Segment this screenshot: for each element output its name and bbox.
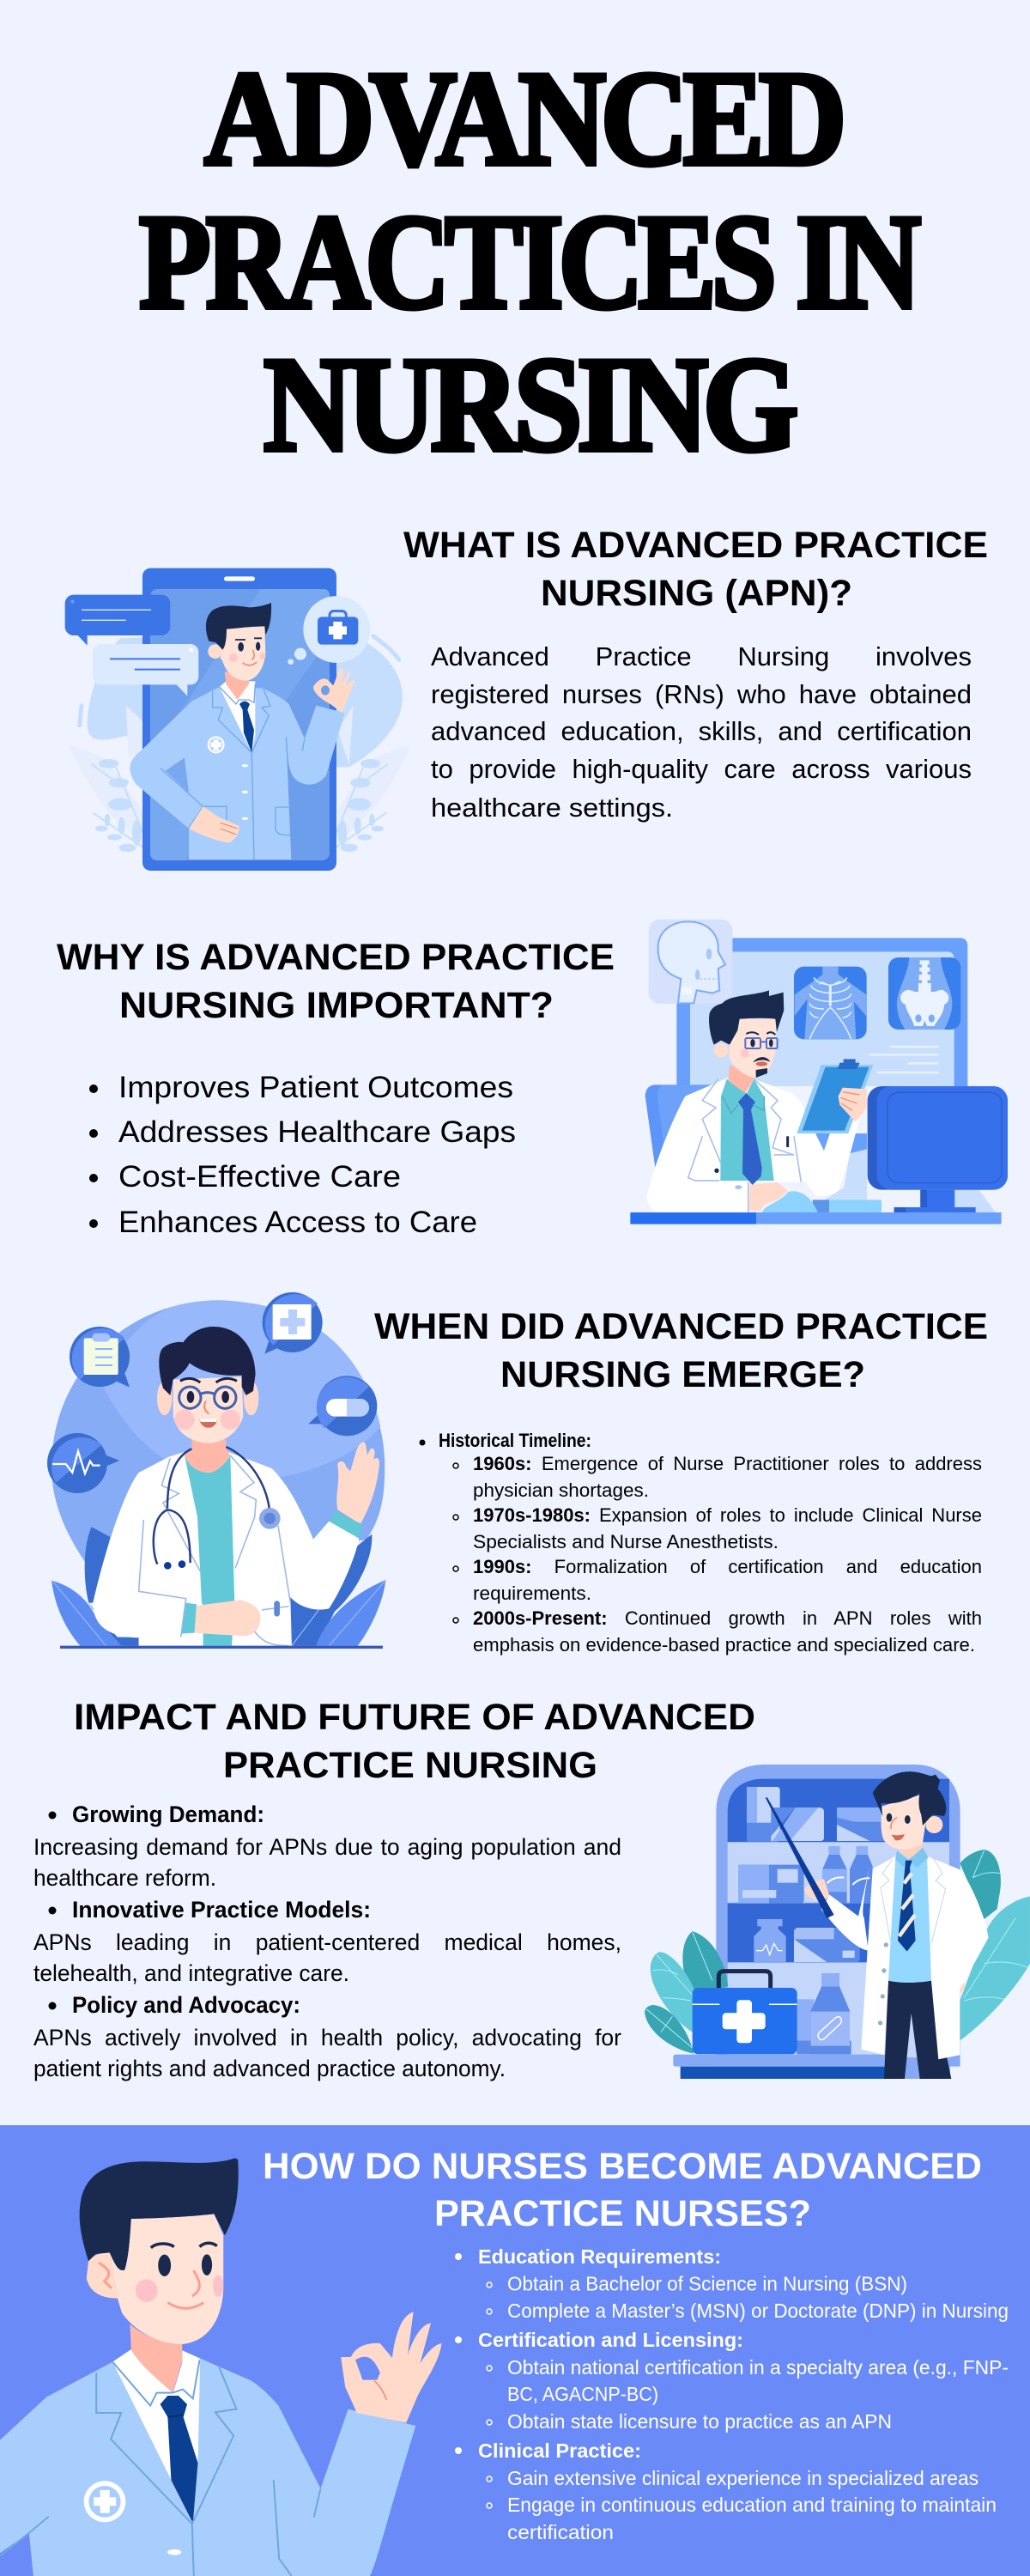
- item: certification and licensing: Obtain state licensure to practice as an APN: [507, 2410, 892, 2433]
- icon: plus bubble: [263, 1292, 323, 1354]
- heading: IMPACT AND FUTURE OF ADVANCED: [74, 1697, 755, 1738]
- bullet list: Improves Patient Outcomes: [118, 1071, 513, 1104]
- heading: NURSING EMERGE?: [500, 1354, 865, 1395]
- icon: desktop monitor: [868, 1086, 1008, 1212]
- timeline list: [419, 1430, 982, 1656]
- heading: [403, 525, 988, 614]
- heading: [57, 937, 615, 1026]
- illustration: doctor in phone: [65, 568, 410, 871]
- item: certification and licensing: BC, AGACNP-BC): [507, 2383, 658, 2405]
- icon: chest x-ray: [794, 967, 867, 1039]
- title: [139, 44, 920, 480]
- item: clinical practice: Engage in continuous education and training to maintain: [507, 2494, 997, 2516]
- icon: pill bubble: [308, 1376, 377, 1436]
- timeline item: 1960s: physician shortages.: [473, 1479, 649, 1501]
- text block: definition: to provide high-quality care across various: [431, 754, 972, 784]
- bullet list: Addresses Healthcare Gaps: [118, 1115, 516, 1149]
- item: certification and licensing: Certification and Licensing:: [478, 2329, 743, 2351]
- timeline item: 1970s-1980s: Specialists and Nurse Anesthetists.: [473, 1531, 779, 1552]
- item: clinical practice: Gain extensive clinical experience in specialized areas: [507, 2467, 978, 2489]
- item: policy and advocacy: patient rights and advanced practice autonomy.: [33, 2056, 506, 2081]
- heading: [263, 2146, 982, 2234]
- list: pathway to APN: [455, 2245, 1009, 2543]
- item: innovative practice models: Innovative Practice Models:: [72, 1897, 371, 1923]
- item: growing demand: [33, 1801, 621, 1891]
- panel: when did it emerge: [47, 1292, 988, 1656]
- heading: WHY IS ADVANCED PRACTICE: [57, 937, 615, 978]
- illustration: doctor with stethoscope: [47, 1292, 385, 1649]
- text block: definition: advanced education, skills, and certification: [431, 716, 972, 746]
- item: innovative practice models: APNs leading in patient-centered medical homes,: [33, 1929, 621, 1955]
- text block: definition: registered nurses (RNs) who have obtained: [431, 679, 972, 709]
- panel: how nurses become APNs: [0, 2125, 1030, 2576]
- item: policy and advocacy: [33, 1992, 621, 2081]
- panel: title: [139, 44, 922, 480]
- item: education requirements: Education Requirements:: [478, 2245, 721, 2268]
- icon: clipboard bubble: [70, 1327, 130, 1388]
- heading: PRACTICE NURSES?: [434, 2193, 811, 2234]
- timeline item: 2000s-present: [453, 1606, 982, 1656]
- panel: why important: [57, 919, 1008, 1239]
- heading: NURSING (APN)?: [541, 573, 852, 614]
- icon: skull x-ray: [649, 920, 732, 1004]
- bullet list: Enhances Access to Care: [118, 1206, 477, 1239]
- panel: what is APN: [65, 525, 988, 871]
- item: innovative practice models: telehealth, and integrative care.: [33, 1960, 349, 1986]
- item: certification and licensing: [455, 2329, 1009, 2433]
- text block: definition: [431, 638, 972, 823]
- heading: HOW DO NURSES BECOME ADVANCED: [263, 2146, 982, 2187]
- icon: clipboard: [797, 1059, 873, 1133]
- text block: definition: Advanced Practice Nursing involves: [431, 641, 972, 671]
- heading: WHEN DID ADVANCED PRACTICE: [374, 1306, 988, 1347]
- item: growing demand: Growing Demand:: [72, 1801, 264, 1827]
- timeline item: 1990s: 1990s: Formalization of certification and education: [473, 1556, 982, 1577]
- icon: blue speech bubble: [65, 595, 170, 646]
- item: education requirements: Complete a Master’s (MSN) or Doctorate (DNP) in Nursing: [507, 2300, 1009, 2322]
- panel: impact and future: [33, 1697, 1030, 2081]
- item: education requirements: [455, 2245, 1009, 2322]
- illustration: doctor at medicine cabinet: [645, 1765, 1030, 2079]
- illustration: large doctor with OK hand: [0, 2158, 441, 2576]
- item: growing demand: healthcare reform.: [33, 1865, 216, 1891]
- timeline item: 1960s: 1960s: Emergence of Nurse Practitioner roles to address: [473, 1453, 982, 1474]
- item: policy and advocacy: APNs actively involved in health policy, advocating for: [33, 2025, 621, 2050]
- impact list: [33, 1801, 621, 2081]
- timeline item: 1970s-1980s: [453, 1503, 982, 1552]
- heading: [74, 1697, 755, 1786]
- heading: WHAT IS ADVANCED PRACTICE: [403, 525, 988, 566]
- icon: medical case bubble: [288, 596, 370, 665]
- item: growing demand: Increasing demand for APNs due to aging population and: [33, 1834, 621, 1860]
- icon: pelvis x-ray: [888, 957, 960, 1030]
- bullet list: [89, 1071, 516, 1239]
- timeline item: 1990s: requirements.: [473, 1583, 591, 1604]
- timeline item: 1960s: [453, 1451, 982, 1501]
- item: innovative practice models: [33, 1897, 621, 1986]
- item: clinical practice: Clinical Practice:: [478, 2439, 641, 2462]
- heading: NURSING IMPORTANT?: [119, 985, 554, 1026]
- title: PRACTICES IN: [139, 187, 920, 337]
- title: NURSING: [264, 330, 796, 480]
- item: education requirements: Obtain a Bachelor of Science in Nursing (BSN): [507, 2272, 907, 2294]
- icon: first aid kit: [693, 1971, 797, 2054]
- item: policy and advocacy: Policy and Advocacy:: [72, 1992, 300, 2018]
- heading: PRACTICE NURSING: [223, 1745, 597, 1786]
- timeline item: 1970s-1980s: 1970s-1980s: Expansion of roles to include Clinical Nurse: [473, 1504, 982, 1526]
- item: clinical practice: certification: [507, 2521, 614, 2543]
- item: certification and licensing: Obtain national certification in a specialty area (e.g., FNP-: [507, 2356, 1009, 2379]
- illustration: doctor reading x-rays: [630, 920, 1008, 1224]
- timeline item: 2000s-present: 2000s-Present: Continued growth in APN roles with: [473, 1607, 982, 1629]
- timeline item: 2000s-present: emphasis on evidence-based practice and specialized care.: [473, 1634, 975, 1656]
- heading: [374, 1306, 988, 1395]
- icon: pulse bubble: [47, 1433, 119, 1493]
- item: clinical practice: [455, 2439, 997, 2543]
- timeline list: Historical Timeline:: [439, 1430, 591, 1451]
- bullet list: Cost-Effective Care: [118, 1160, 401, 1194]
- icon: light speech bubble: [93, 644, 198, 696]
- title: ADVANCED: [204, 44, 841, 194]
- timeline item: 1990s: [453, 1554, 982, 1604]
- text block: definition: healthcare settings.: [431, 793, 673, 823]
